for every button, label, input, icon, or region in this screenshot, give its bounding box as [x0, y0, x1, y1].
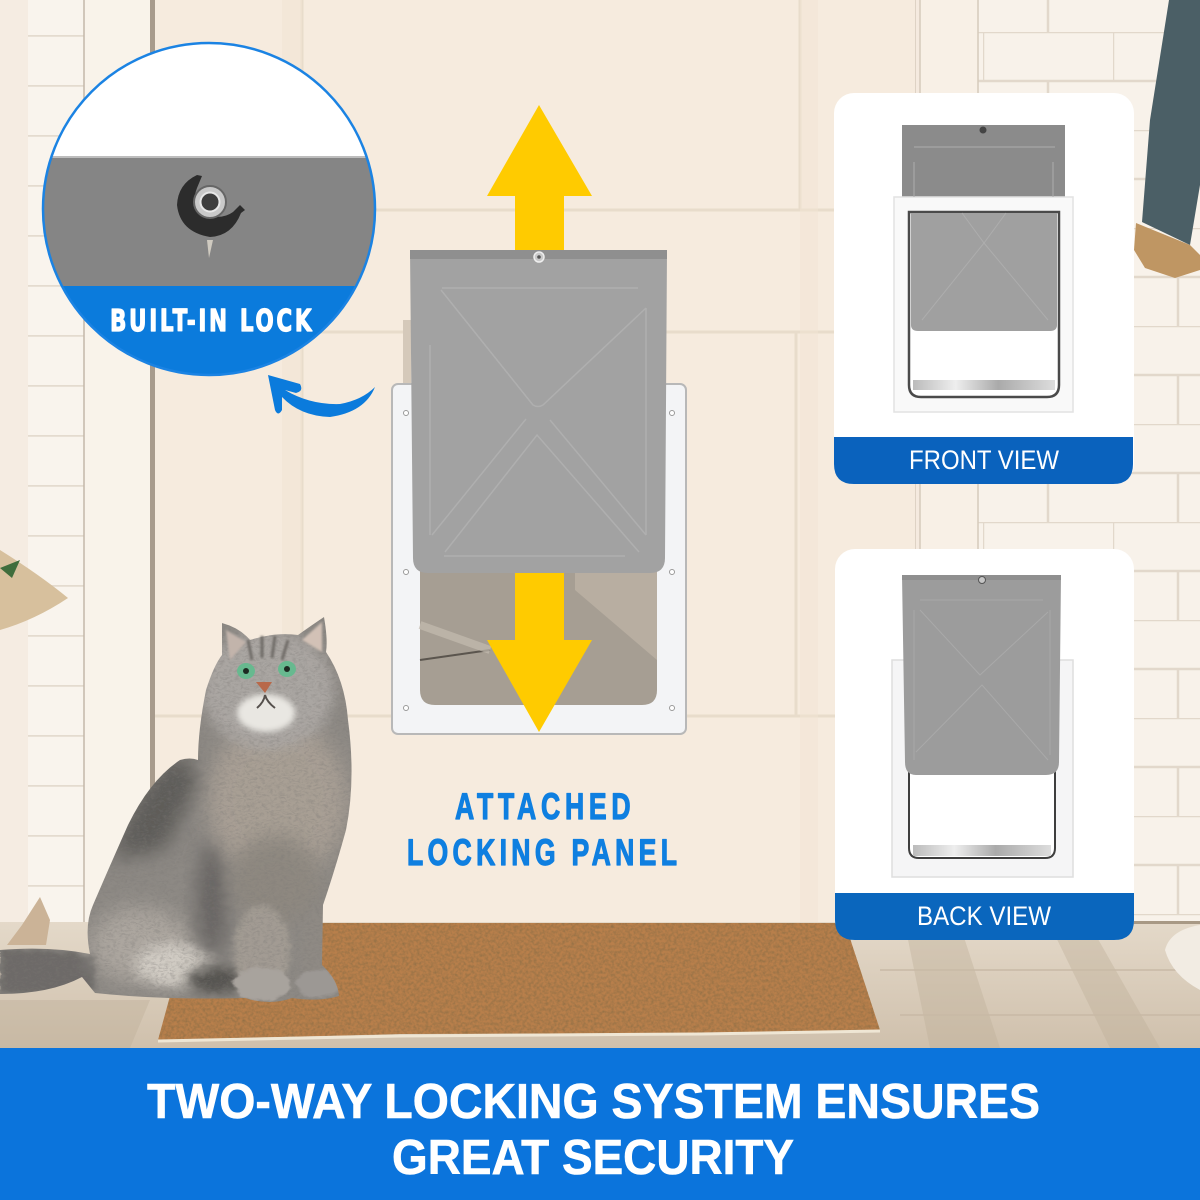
- left decor items: [0, 550, 68, 945]
- door illustration: back: [892, 575, 1073, 877]
- bottom banner: [0, 1048, 1200, 1200]
- callout: built-in lock: [40, 43, 380, 381]
- grey locking panel: [410, 250, 667, 573]
- label: back view: BACK VIEW: [917, 901, 1051, 931]
- double-headed yellow arrow: [487, 105, 592, 732]
- cat: [0, 610, 360, 1010]
- label: attached locking panel: LOCKING PANEL: [407, 832, 677, 873]
- icon: lock knob: [177, 175, 245, 258]
- headline: GREAT SECURITY: [392, 1131, 794, 1185]
- panel: back view: [835, 549, 1134, 940]
- label: front view: FRONT VIEW: [909, 445, 1059, 475]
- cat tail: [0, 949, 95, 994]
- label: built-in lock: BUILT-IN LOCK: [110, 305, 313, 339]
- doormat: [150, 920, 890, 1045]
- label: attached locking panel: [407, 786, 677, 873]
- bowl: [1165, 925, 1200, 990]
- headline: TWO-WAY LOCKING SYSTEM ENSURES: [147, 1075, 1040, 1129]
- coat and basket: [1134, 0, 1200, 278]
- arrow: curved to callout: [268, 375, 375, 417]
- label: attached locking panel: ATTACHED: [455, 786, 631, 827]
- panel: front view: [834, 93, 1134, 484]
- pet door frame: [392, 320, 686, 734]
- cat face: [226, 622, 322, 732]
- door illustration: front: [894, 125, 1073, 412]
